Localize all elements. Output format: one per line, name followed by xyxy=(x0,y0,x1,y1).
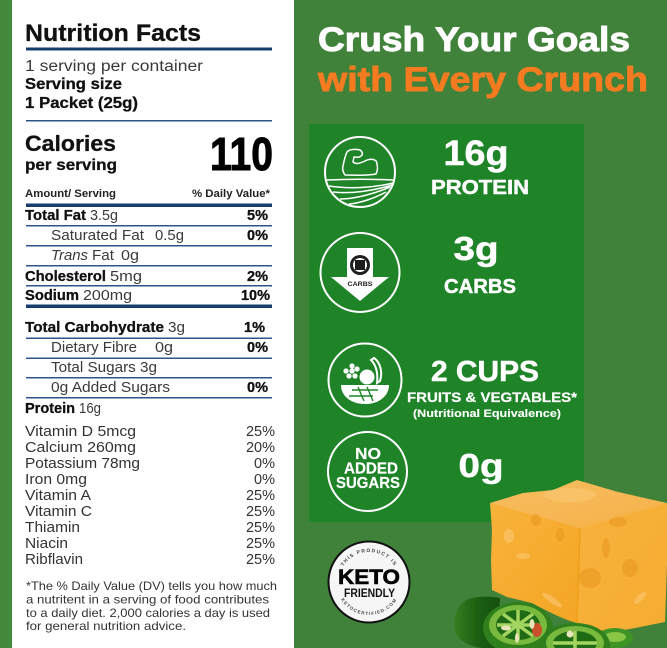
nutrient table: 16g xyxy=(79,401,101,417)
vitamins and minerals: Calcium 260mg xyxy=(25,440,136,456)
stat: fruits and vegetables: FRUITS & VEGTABLES* xyxy=(407,389,578,405)
image: cheddar cheese block xyxy=(490,480,667,633)
vitamins and minerals: 25% xyxy=(246,520,275,536)
serving information: 1 Packet (25g) xyxy=(25,95,138,112)
vitamins and minerals: 25% xyxy=(246,536,275,552)
nutrient table: 10% xyxy=(241,288,270,304)
nutrient table: Trans xyxy=(51,248,88,264)
vitamins and minerals: Potassium 78mg xyxy=(25,456,140,472)
stat: carbs: CARBS xyxy=(444,276,516,298)
calories: 110 xyxy=(210,128,273,180)
serving information: Serving size xyxy=(25,76,122,93)
nutrient table: 3.5g xyxy=(90,208,118,224)
nutrient table: 0% xyxy=(247,380,268,396)
vitamins and minerals: 0% xyxy=(254,472,275,488)
badge: keto friendly: THIS PRODUCT IS xyxy=(340,548,396,566)
icon: no added sugars: SUGARS xyxy=(336,475,400,492)
vitamins and minerals: 20% xyxy=(246,440,275,456)
nutrient table: 0g xyxy=(121,248,139,264)
nutrient table: Total Carbohydrate xyxy=(25,320,164,336)
stat: protein xyxy=(431,134,529,199)
icon: no added sugars xyxy=(328,432,407,511)
footnote: a nutritent in a serving of food contributes xyxy=(26,592,269,606)
vitamins and minerals: Niacin xyxy=(25,536,68,552)
column headers xyxy=(25,188,271,200)
stat: fruits and vegetables: 2 CUPS xyxy=(431,356,539,388)
nutrient table: 0g Added Sugars xyxy=(51,380,170,396)
nutrient table: Saturated Fat xyxy=(51,228,144,244)
nutrient table: Protein xyxy=(25,401,75,417)
vitamins and minerals xyxy=(25,424,275,568)
nutrient table: 0.5g xyxy=(155,228,184,244)
footnote: *The % Daily Value (DV) tells you how much xyxy=(26,579,277,593)
calories: per serving xyxy=(25,157,117,174)
serving information xyxy=(25,58,203,112)
icon: no added sugars: ADDED xyxy=(344,460,398,478)
heading: nutrition facts: Nutrition Facts xyxy=(25,20,201,47)
stat: zero sugar: 0g xyxy=(458,447,504,484)
image: jalapeno slices xyxy=(454,597,633,648)
vitamins and minerals: Ribflavin xyxy=(25,552,83,568)
headline xyxy=(317,21,648,99)
vitamins and minerals: Iron 0mg xyxy=(25,472,87,488)
stat: protein: 16g xyxy=(444,134,508,173)
stat: protein: PROTEIN xyxy=(431,177,529,199)
icon: protein muscle and field xyxy=(325,137,395,207)
vitamins and minerals: Vitamin C xyxy=(25,504,92,520)
panel: nutrition facts label xyxy=(12,0,294,648)
panel: benefits xyxy=(309,124,584,522)
icon: low carbs arrow xyxy=(320,233,400,312)
vitamins and minerals: 25% xyxy=(246,488,275,504)
vitamins and minerals: 25% xyxy=(246,424,275,440)
nutrient table: 200mg xyxy=(83,288,132,304)
calories xyxy=(25,128,273,180)
nutrient table: 5mg xyxy=(110,269,142,285)
stat: carbs: 3g xyxy=(454,230,498,267)
icon: low carbs arrow: CARBS xyxy=(348,282,372,288)
badge: keto friendly: FRIENDLY xyxy=(344,588,395,600)
badge: keto friendly: KETOCERTIFIED.COM xyxy=(341,598,396,615)
nutrient table: 0% xyxy=(247,340,268,356)
nutrient table: 2% xyxy=(247,269,268,285)
nutrient table: 5% xyxy=(247,208,268,224)
footnote xyxy=(26,579,277,633)
vitamins and minerals: 0% xyxy=(254,456,275,472)
icon: no added sugars: NO xyxy=(355,446,381,463)
footnote: to a daily diet. 2,000 calories a day is used xyxy=(26,606,270,620)
nutrient table: 0% xyxy=(247,228,268,244)
nutrient table: Total Fat xyxy=(25,208,86,224)
nutrient table: Dietary Fibre xyxy=(51,340,137,356)
stat: fruits and vegetables xyxy=(407,356,578,420)
serving information: 1 serving per container xyxy=(25,58,203,75)
stat: fruits and vegetables: (Nutritional Equivalence) xyxy=(413,408,561,420)
headline: Crush Your Goals xyxy=(318,21,630,59)
badge: keto friendly xyxy=(328,540,410,624)
column headers: % Daily Value* xyxy=(192,188,271,200)
icon: fruit and vegetable bowl xyxy=(328,344,402,416)
badge: keto friendly: KETO xyxy=(338,566,400,589)
right green background xyxy=(294,0,667,648)
vitamins and minerals: Vitamin A xyxy=(25,488,91,504)
nutrient table: 0g xyxy=(155,340,173,356)
nutrient table: 3g xyxy=(168,320,185,336)
column headers: Amount/ Serving xyxy=(25,188,116,200)
nutrient table: Cholesterol xyxy=(25,269,106,285)
footnote: for general nutrition advice. xyxy=(26,619,186,633)
vitamins and minerals: 25% xyxy=(246,504,275,520)
vitamins and minerals: Vitamin D 5mcg xyxy=(25,424,136,440)
nutrient table: 1% xyxy=(244,320,265,336)
calories: Calories xyxy=(25,131,116,156)
vitamins and minerals: Thiamin xyxy=(25,520,80,536)
nutrient table xyxy=(25,208,272,417)
left green background xyxy=(0,0,13,648)
nutrient table: Fat xyxy=(92,248,114,264)
stat: carbs xyxy=(444,230,516,298)
nutrient table: Sodium xyxy=(25,288,79,304)
headline: with Every Crunch xyxy=(317,61,648,99)
nutrient table: Total Sugars 3g xyxy=(51,360,157,376)
vitamins and minerals: 25% xyxy=(246,552,275,568)
